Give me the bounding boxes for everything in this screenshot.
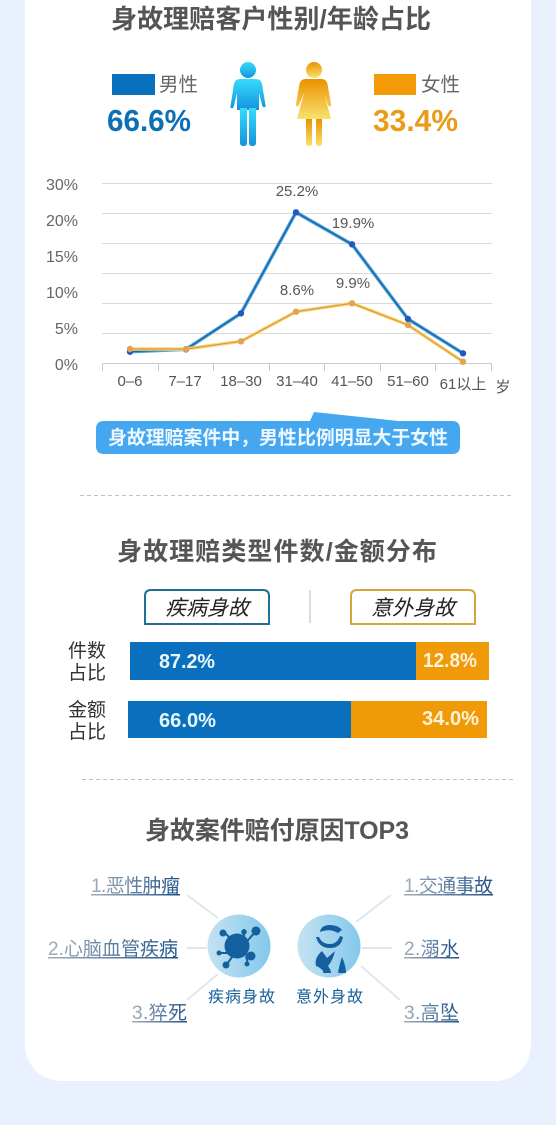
connector lines [187, 895, 400, 1000]
tag: illness death [145, 590, 269, 624]
label: accident death: 意外身故 [296, 987, 363, 1006]
bar: amount share: 占比 [68, 721, 106, 743]
line chart: age distribution: 5% [55, 321, 78, 338]
line chart: age distribution [46, 177, 511, 396]
bar: case count share: 件数 [68, 640, 106, 662]
legend: male: 男性 [159, 74, 198, 96]
line chart: age distribution: 20% [46, 213, 78, 230]
line chart: age distribution: 19.9% [332, 215, 374, 232]
line chart: age distribution: 0–6 [117, 373, 143, 390]
list: accident causes [404, 875, 493, 1024]
line chart: age distribution: 7–17 [168, 373, 202, 390]
bar: case count share [68, 640, 489, 684]
list: illness causes: 2.心脑血管疾病 [48, 938, 178, 960]
bar: case count share: 87.2% [159, 651, 215, 673]
icon: female figure [296, 62, 331, 146]
bar: case count share: 12.8% [423, 650, 477, 672]
heading: type distribution: 身故理赔类型件数/金额分布 [117, 538, 437, 566]
line chart: age distribution: 41–50 [331, 373, 373, 390]
bar: case count share: 占比 [68, 662, 106, 684]
heading: gender and age share: 身故理赔客户性别/年龄占比 [111, 4, 431, 34]
line chart: age distribution: 8.6% [280, 282, 314, 299]
icon: male figure [230, 62, 266, 146]
line chart: age distribution: 31–40 [276, 373, 318, 390]
line chart: age distribution: 15% [46, 249, 78, 266]
callout: male share higher: 身故理赔案件中，男性比例明显大于女性 [108, 426, 448, 449]
heading: top 3 causes: 身故案件赔付原因TOP3 [145, 817, 409, 845]
line chart: age distribution: 61以上 [440, 376, 486, 393]
list: illness causes: 1.恶性肿瘤 [91, 875, 180, 897]
line chart: age distribution: 51–60 [387, 373, 429, 390]
line chart: age distribution: 30% [46, 177, 78, 194]
list: illness causes: 3.猝死 [132, 1002, 187, 1024]
legend: female: 女性 [421, 74, 460, 96]
line chart: age distribution: 9.9% [336, 275, 370, 292]
list: accident causes: 3.高坠 [404, 1002, 459, 1024]
bar: amount share: 66.0% [159, 710, 216, 732]
legend: female: 33.4% [373, 103, 458, 138]
line chart: age distribution: 0% [55, 357, 78, 374]
line chart: age distribution: 岁 [495, 379, 511, 396]
line chart: age distribution: 10% [46, 285, 78, 302]
tag: illness death: 疾病身故 [165, 597, 252, 620]
legend: female [373, 74, 460, 138]
line chart: age distribution: 25.2% [276, 183, 318, 200]
callout: male share higher [96, 412, 460, 454]
label: illness death: 疾病身故 [208, 988, 275, 1006]
list: accident causes: 1.交通事故 [404, 875, 493, 897]
legend: male: 66.6% [107, 103, 191, 138]
bar: amount share: 34.0% [422, 708, 479, 730]
bar: amount share [68, 699, 487, 743]
list: accident causes: 2.溺水 [404, 938, 459, 960]
list: illness causes [48, 875, 187, 1024]
tag: accident death [351, 590, 475, 624]
icon: accident badge [298, 914, 360, 978]
tag: accident death: 意外身故 [371, 597, 458, 620]
legend: male [107, 74, 198, 138]
line chart: age distribution: 18–30 [220, 373, 262, 390]
bar: amount share: 金额 [68, 699, 106, 721]
icon: virus badge [208, 914, 270, 978]
